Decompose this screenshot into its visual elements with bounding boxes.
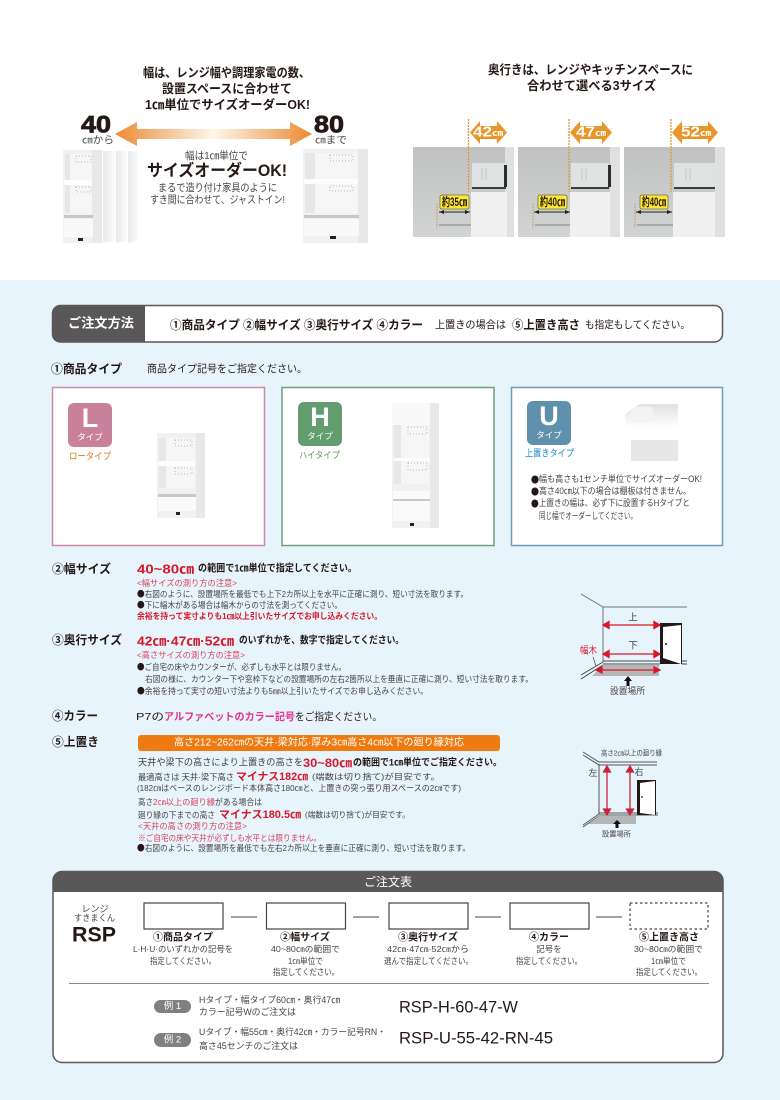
- diagram: measuring width: 設置場所: [610, 685, 645, 696]
- section: top unit: ⑤上置き: [52, 735, 99, 749]
- section: depth size: [52, 632, 533, 697]
- photo: depth 47: 約40㎝: [540, 194, 565, 209]
- column: width: 40~80㎝の範囲で: [271, 944, 340, 954]
- text: top unit instructions: ●右図のように、設置場所を最低でも左右2カ所以上を垂直に正確に測り、短い寸法を取ります。: [137, 842, 470, 854]
- badge: L type: [68, 403, 112, 447]
- banner: ceiling height: [138, 735, 500, 751]
- text: top unit instructions: ※ご自宅の床や天井が必ずしも水平とは限りません。: [138, 833, 321, 843]
- label: 80cm: ㎝まで: [315, 134, 347, 146]
- column: color: ④カラー: [529, 932, 569, 944]
- section: depth size: ③奥行サイズ: [52, 632, 122, 647]
- section: depth size: ●ご自宅の床やカウンターが、必ずしも水平とは限りません。: [137, 661, 346, 673]
- column: depth: [384, 930, 473, 966]
- product name: RSP: RSP: [72, 924, 116, 946]
- section: color: P7の: [136, 711, 164, 723]
- panel: L low type: [52, 388, 264, 546]
- text: top unit instructions: がある場合は: [215, 797, 262, 807]
- column: product type: ①商品タイプ: [153, 930, 213, 944]
- badge: L type: タイプ: [77, 432, 103, 442]
- label: low type: ロータイプ: [69, 452, 111, 462]
- photo: depth 52: 約40㎝: [642, 194, 666, 209]
- photo: depth 42: 約35㎝: [442, 194, 467, 209]
- text: top unit instructions: 30~80㎝: [303, 756, 352, 770]
- diagram: measuring width: 上: [628, 612, 638, 624]
- photo: depth 47: 47: [576, 124, 595, 140]
- cabinet: low: [157, 433, 205, 518]
- text: top unit instructions: 天井や梁下の高さにより上置きの高さを: [138, 756, 303, 768]
- section: width size: ●下に幅木がある場合は幅木からの寸法を測ってください。: [137, 599, 342, 611]
- text: size order ok: まるで造り付け家具のように: [158, 181, 277, 194]
- section: depth size: ●余裕を持って実寸の短い寸法よりも5㎜以上引いたサイズでお申し込みください。: [137, 685, 428, 697]
- text: top unit instructions: (端数は切り捨て)が目安です。: [312, 772, 440, 782]
- section: width size: <幅サイズの測り方の注意>: [137, 578, 237, 588]
- section: width size: 40~80㎝: [137, 562, 194, 576]
- column: color: [516, 932, 582, 966]
- column: width: ②幅サイズ: [280, 930, 330, 944]
- entry boxes: [144, 903, 708, 929]
- banner: ceiling height: 高さ212~262㎝の天井·梁対応·厚み3㎝高さ4㎝以下の廻り縁対応: [174, 736, 464, 748]
- column: product type: [133, 930, 233, 966]
- column: color: 記号を: [536, 944, 562, 954]
- notes: top type: ●高さ40㎝以下の場合は棚板は付きません。: [531, 484, 691, 498]
- panel: order form: [53, 871, 723, 1062]
- text: top unit instructions: [137, 756, 502, 854]
- badge: L type: L: [82, 403, 98, 433]
- notes: top type: 同じ幅でオーダーしてください。: [539, 510, 637, 521]
- text: size order ok: サイズオーダーOK!: [147, 160, 287, 180]
- section: top unit: [52, 735, 502, 854]
- example 1: RSP-H-60-47-W: [399, 998, 518, 1016]
- diagram: measuring height: [583, 748, 662, 838]
- label: 80cm: [314, 112, 347, 146]
- label: top type: 上置きタイプ: [525, 448, 574, 460]
- product name: RSP: レンジ: [81, 904, 109, 914]
- photo: depth 47: [518, 119, 620, 237]
- badge: H type: タイプ: [307, 431, 333, 441]
- section: depth size: 42㎝·47㎝·52㎝: [137, 634, 234, 648]
- section: width size: [52, 561, 468, 621]
- heading: product type: 商品タイプ記号をご指定ください。: [147, 362, 307, 375]
- cabinet: 80cm width: [303, 149, 368, 243]
- section: color: アルファベットのカラー記号: [164, 711, 295, 723]
- heading: width: [143, 65, 310, 112]
- column: color: 指定してください。: [516, 956, 582, 966]
- panel: order method banner: ①商品タイプ ②幅サイズ ③奥行サイズ ④カラー: [170, 317, 423, 332]
- example 2: [154, 1026, 553, 1051]
- panel: order method banner: ⑤上置き高さ: [512, 317, 580, 332]
- label: 40cm: 40: [81, 112, 111, 138]
- heading: depth: 奥行きは、レンジやキッチンスペースに: [488, 62, 693, 77]
- section: width size: ●右図のように、設置場所を最低でも上下2カ所以上を水平に正確に測り、短い寸法を取ります。: [137, 588, 468, 600]
- example 2: 高さ45センチのご注文は: [199, 1040, 298, 1051]
- diagram: measuring height: 左: [588, 767, 598, 778]
- section: depth size: のいずれかを、数字で指定してください。: [239, 634, 404, 646]
- badge: H type: H: [310, 402, 330, 432]
- notes: top type: [531, 472, 702, 521]
- diagram: measuring width: 下: [628, 640, 638, 652]
- heading: product type: [51, 361, 307, 376]
- photo: depth 52: [624, 119, 725, 237]
- example 2: Uタイプ・幅55㎝・奥行42㎝・カラー記号RN・: [199, 1026, 386, 1037]
- column: top height: 指定してください。: [636, 967, 702, 977]
- text: size order ok: 幅は1㎝単位で: [185, 149, 248, 162]
- page background: light blue lower section: [0, 280, 780, 1100]
- example 1: Hタイプ・幅タイプ60㎝・奥行47㎝: [199, 994, 340, 1005]
- photo: depth 47: ㎝: [595, 128, 606, 138]
- text: top unit instructions: マイナス180.5㎝: [219, 808, 301, 821]
- heading: depth: 合わせて選べる3サイズ: [527, 78, 656, 93]
- notes: top type: ●上置きの幅は、必ず下に設置するHタイプと: [531, 496, 690, 510]
- text: top unit instructions: 廻り縁の下までの高さ: [138, 810, 215, 820]
- heading: depth: [488, 62, 693, 93]
- heading: width: 幅は、レンジ幅や調理家電の数、: [143, 65, 310, 80]
- text: size order ok: [147, 149, 287, 206]
- section: width size order: [63, 65, 368, 243]
- notes: top type: ●幅も高さも1センチ単位でサイズオーダーOK!: [531, 472, 702, 486]
- badge: H type: [298, 402, 342, 446]
- panel: order method banner: [52, 305, 722, 342]
- example 2: RSP-U-55-42-RN-45: [399, 1028, 553, 1048]
- heading: width: 設置スペースに合わせて: [162, 81, 292, 96]
- badge: U type: U: [539, 401, 559, 431]
- text: top unit instructions: マイナス182㎝: [236, 770, 308, 783]
- text: top unit instructions: の範囲で1㎝単位でご指定ください。: [353, 756, 502, 768]
- example 2: 例 2: [164, 1034, 181, 1046]
- section: color: [52, 709, 382, 723]
- panel: order method banner: も指定もしてください。: [585, 318, 690, 331]
- section: depth sizes: [413, 62, 725, 237]
- product name: RSP: [72, 904, 116, 946]
- section: depth size: 右図の様に、カウンター下や窓枠下などの設置場所の左右2箇所以上を垂直に正確に測り、短い寸法を取ります。: [145, 674, 533, 684]
- panel: U top type: [512, 388, 722, 546]
- label: 40cm: ㎝から: [82, 134, 114, 146]
- diagram: measuring height: 右: [634, 766, 644, 777]
- badge: U type: タイプ: [536, 430, 562, 440]
- column: top height: 1㎝単位で: [651, 956, 686, 966]
- text: top unit instructions: (182㎝はベースのレンジボード本体高さ180㎝と、上置きの突っ張り用スペースの2㎝です): [137, 783, 461, 793]
- text: top unit instructions: <天井の高さの測り方の注意>: [138, 821, 247, 831]
- column: product type: 指定してください。: [150, 956, 216, 966]
- photo: depth 52: 52: [681, 124, 700, 140]
- panel: order method banner: 上置きの場合は: [435, 318, 506, 331]
- text: top unit instructions: 2㎝以上の廻り縁: [153, 797, 215, 807]
- section: width size: ②幅サイズ: [52, 561, 111, 576]
- label: high type: ハイタイプ: [299, 450, 340, 462]
- image: top unit open: [625, 404, 678, 428]
- column: width: 指定してください。: [273, 967, 339, 977]
- panel: H high type: [282, 388, 494, 546]
- example 1: [154, 994, 518, 1017]
- diagram: measuring height: 設置場所: [602, 828, 631, 838]
- image: top unit closed: [631, 440, 678, 461]
- product name: RSP: すきまくん: [74, 913, 115, 923]
- column: top height: [634, 930, 703, 977]
- column: top height: 30~80㎝の範囲で: [634, 944, 703, 954]
- photo: depth 52: ㎝: [700, 128, 711, 138]
- column: width: 1㎝単位で: [288, 956, 323, 966]
- column: depth: 選んで指定してください。: [384, 956, 473, 966]
- label: 40cm: [81, 112, 114, 146]
- heading: product type: ①商品タイプ: [51, 361, 122, 376]
- arrow: 40 to 80 cm: [115, 122, 312, 146]
- example 1: 例 1: [164, 1000, 181, 1012]
- diagram: measuring width: [580, 594, 687, 696]
- header: order form: [53, 871, 723, 892]
- photo: depth 42: [413, 119, 514, 237]
- section: width size: 余裕を持って実寸よりも1㎝以上引いたサイズでお申し込みください。: [137, 611, 382, 621]
- diagram: measuring width: 幅木: [580, 644, 597, 656]
- text: top unit instructions: 最適高さは 天井·梁下高さ: [138, 772, 234, 782]
- column: depth: ③奥行サイズ: [398, 930, 458, 944]
- panel: order method banner: ご注文方法: [68, 316, 134, 330]
- cabinet: high: [392, 403, 439, 528]
- column: top height: ⑤上置き高さ: [639, 930, 699, 944]
- column: width: [271, 930, 340, 977]
- photo: depth 42: 42: [473, 124, 492, 140]
- cabinet: 40cm width: [63, 150, 102, 243]
- photo: depth 42: ㎝: [492, 128, 503, 138]
- section: width size: の範囲で1㎝単位で指定してください。: [198, 562, 357, 574]
- section: depth size: <高さサイズの測り方の注意>: [137, 650, 245, 660]
- example 1: カラー記号Wのご注文は: [199, 1006, 296, 1017]
- heading: width: 1㎝単位でサイズオーダーOK!: [145, 97, 310, 112]
- badge: U type: [527, 401, 571, 445]
- diagram: measuring height: 高さ2㎝以上の廻り縁: [601, 748, 662, 758]
- extension panels: [103, 151, 138, 243]
- section: color: ④カラー: [52, 709, 98, 723]
- text: size order ok: すき間に合わせて、ジャストイン!: [150, 193, 285, 206]
- column: depth: 42㎝·47㎝·52㎝から: [387, 944, 469, 954]
- column: product type: L·H·U·のいずれかの記号を: [133, 944, 233, 954]
- text: top unit instructions: (端数は切り捨て)が目安です。: [305, 810, 410, 820]
- label: 80cm: 80: [314, 112, 344, 138]
- section: color: をご指定ください。: [295, 710, 382, 723]
- text: top unit instructions: 高さ: [138, 797, 153, 807]
- header: order form: ご注文表: [364, 874, 412, 889]
